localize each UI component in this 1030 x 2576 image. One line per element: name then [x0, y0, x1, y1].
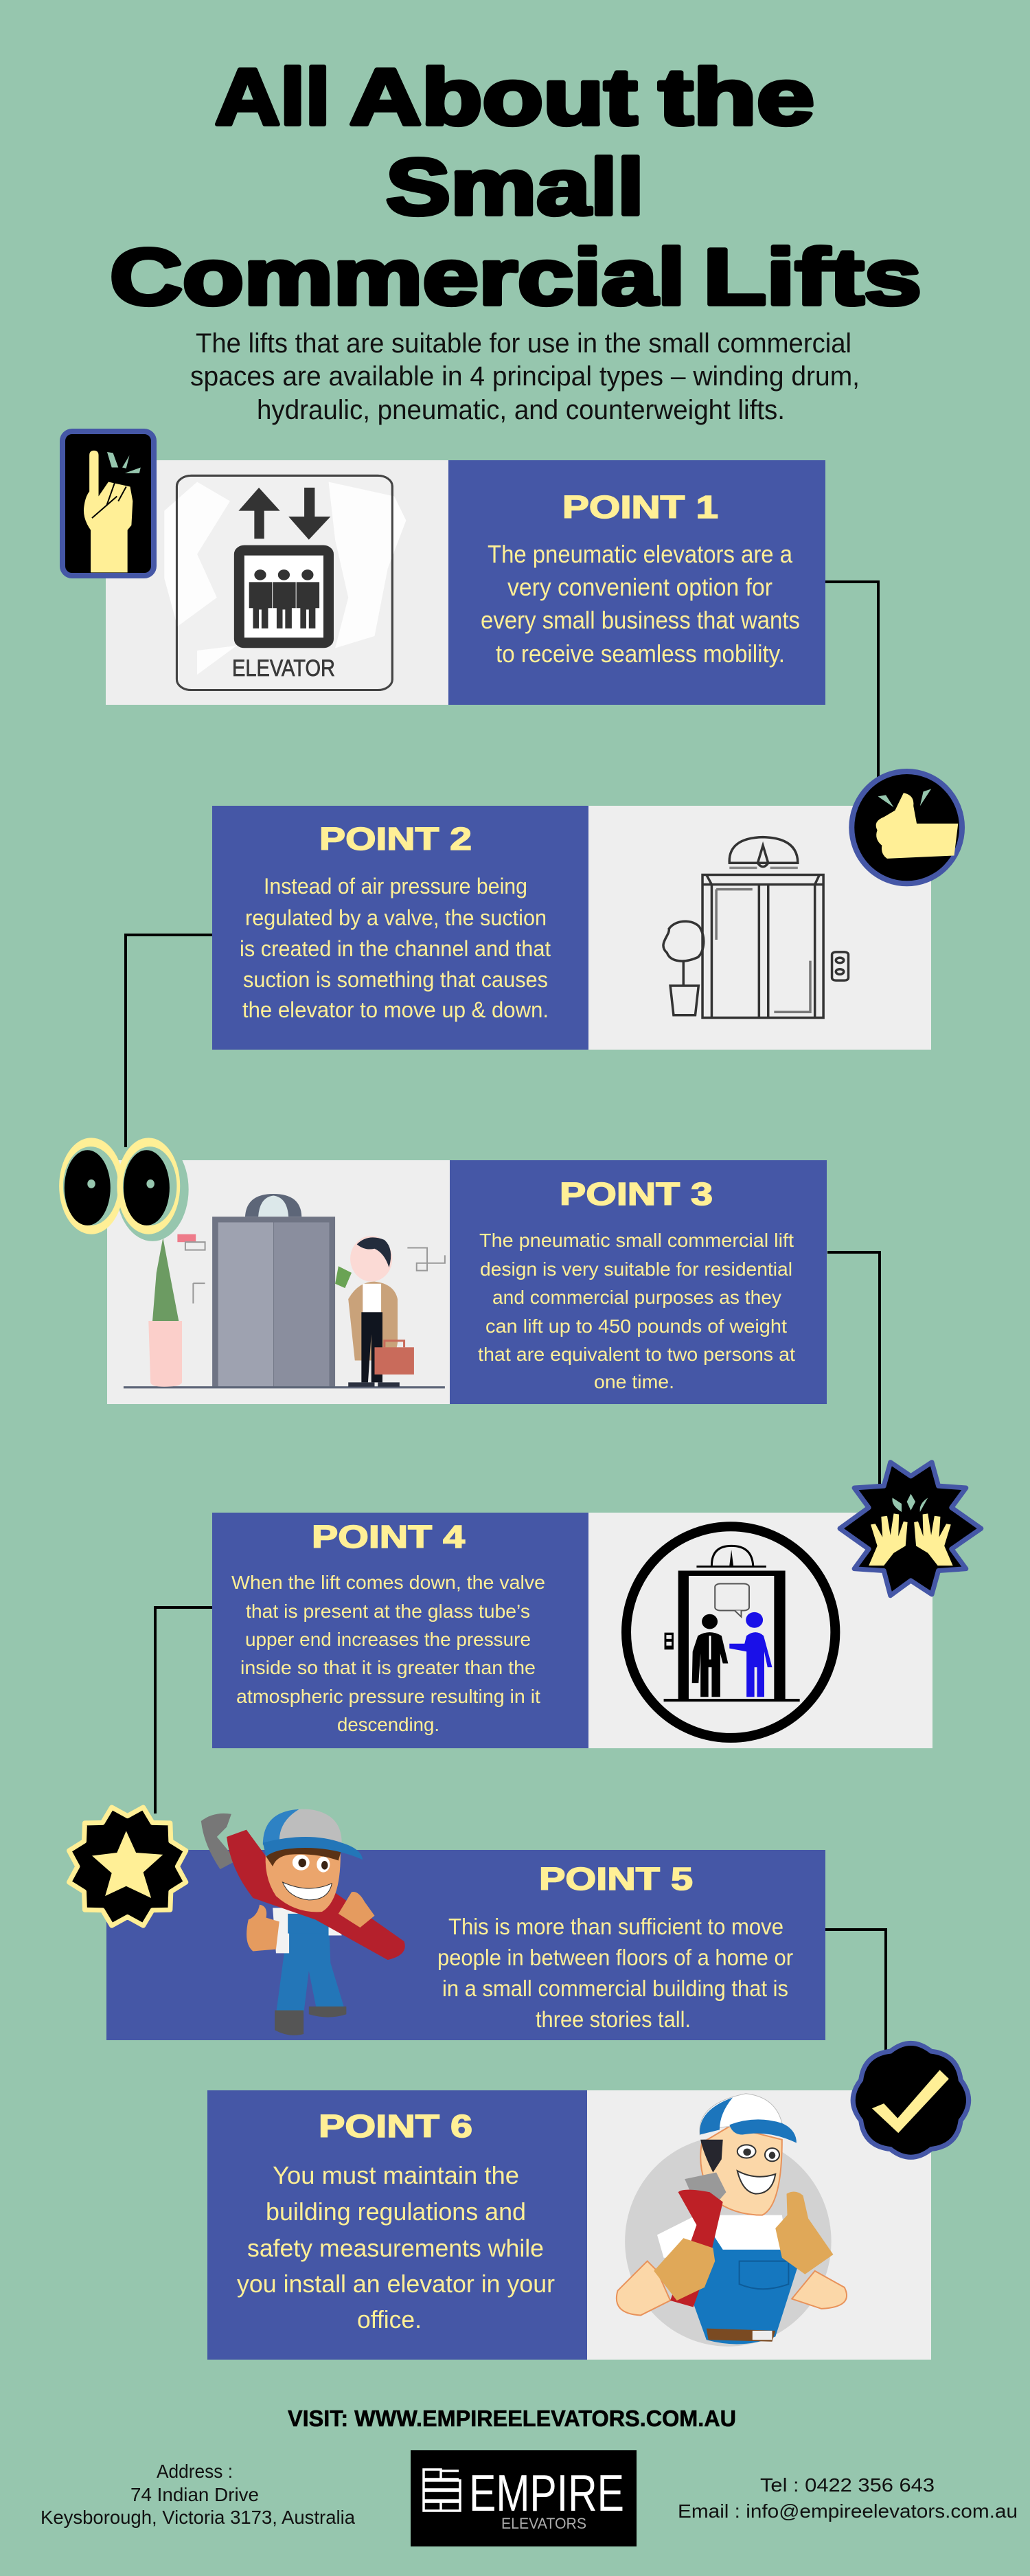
icon: check mark badge — [853, 2043, 969, 2157]
address block — [41, 2461, 355, 2528]
panel: point 3: design is very suitable for residential — [480, 1258, 792, 1280]
panel: point 4: POINT 4 — [312, 1519, 466, 1555]
logo: Empire Elevators — [411, 2450, 637, 2546]
title: About — [350, 52, 637, 142]
icon: mechanic with thumbs up — [617, 2094, 847, 2347]
icon: star badge — [69, 1807, 186, 1925]
logo: Empire Elevators: EMPIRE — [469, 2464, 624, 2522]
icon: elevator sign — [164, 475, 406, 690]
panel: point 5: people in between floors of a home or — [437, 1945, 793, 1970]
address block: 74 Indian Drive — [130, 2484, 259, 2505]
panel: point 4: upper end increases the pressure — [245, 1629, 531, 1650]
panel: point 6 — [207, 2090, 931, 2360]
panel: point 3: The pneumatic small commercial lift — [479, 1230, 794, 1251]
title: the — [659, 52, 814, 142]
panel: point 1: to receive seamless mobility. — [496, 640, 785, 668]
panel: point 6: safety measurements while — [247, 2234, 544, 2262]
panel: point 1: The pneumatic elevators are a — [488, 540, 793, 568]
panel: point 6: POINT 6 — [319, 2108, 472, 2144]
panel: point 5: This is more than sufficient to move — [448, 1914, 783, 1939]
address block: Address : — [157, 2461, 233, 2482]
panel: point 3: one time. — [594, 1371, 674, 1392]
contact details: Tel : 0422 356 643 — [760, 2474, 935, 2496]
address block: Keysborough, Victoria 3173, Australia — [41, 2507, 355, 2528]
panel: point 1: ELEVATOR — [232, 655, 335, 681]
panel: point 5: three stories tall. — [536, 2007, 691, 2032]
panel: point 4: descending. — [337, 1714, 439, 1735]
panel: point 3 — [107, 1160, 827, 1404]
panel: point 4: inside so that it is greater than the — [240, 1657, 536, 1678]
panel: point 1: POINT 1 — [562, 489, 718, 525]
panel: point 4: that is present at the glass tube’s — [246, 1601, 530, 1622]
panel: point 1: very convenient option for — [507, 573, 772, 601]
icon: pointing finger badge — [62, 431, 154, 576]
icon: people in elevator ring — [626, 1526, 835, 1738]
icon: elevator and businessman — [124, 1194, 445, 1388]
icon: raised hands star badge — [840, 1462, 981, 1596]
icon: mechanic with wrench — [201, 1809, 405, 2035]
icon: line-art elevator — [663, 837, 848, 1018]
icon: thumbs up badge — [851, 771, 962, 883]
panel: point 4: atmospheric pressure resulting in it — [236, 1686, 540, 1707]
contact details — [678, 2474, 1018, 2522]
panel: point 2: POINT 2 — [319, 821, 472, 857]
intro text — [190, 328, 860, 425]
panel: point 3: that are equivalent to two persons at — [478, 1344, 795, 1365]
title: Small — [386, 142, 644, 231]
panel: point 3: POINT 3 — [560, 1176, 713, 1212]
panel: point 5: POINT 5 — [539, 1861, 693, 1897]
panel: point 1 — [106, 460, 825, 705]
contact details: Email : info@empireelevators.com.au — [678, 2500, 1018, 2522]
panel: point 4: When the lift comes down, the valve — [231, 1572, 545, 1593]
icon: eyes — [59, 1138, 189, 1241]
intro text: The lifts that are suitable for use in the small commercial — [196, 328, 851, 359]
panel: point 6: you install an elevator in your — [237, 2270, 555, 2298]
title: All — [215, 52, 330, 142]
logo: Empire Elevators: ELEVATORS — [501, 2515, 586, 2532]
panel: point 2: regulated by a valve, the suction — [245, 905, 547, 930]
panel: point 6: building regulations and — [266, 2197, 526, 2226]
icon: logo building mark — [424, 2470, 460, 2511]
panel: point 4 — [212, 1513, 932, 1748]
panel: point 2: is created in the channel and that — [240, 936, 551, 961]
intro text: spaces are available in 4 principal types – winding drum, — [190, 361, 860, 392]
website link: VISIT: WWW.EMPIREELEVATORS.COM.AU — [288, 2406, 736, 2431]
panel: point 1: every small business that wants — [481, 606, 800, 634]
panel: point 5: in a small commercial building that is — [442, 1976, 788, 2001]
panel: point 2 — [212, 806, 931, 1050]
panel: point 3: can lift up to 450 pounds of weight — [485, 1315, 787, 1337]
panel: point 3: and commercial purposes as they — [492, 1287, 781, 1308]
title — [110, 52, 922, 321]
intro text: hydraulic, pneumatic, and counterweight lifts. — [257, 395, 785, 425]
panel: point 2: Instead of air pressure being — [264, 874, 527, 899]
panel: point 2: suction is something that causes — [243, 967, 548, 992]
title: Commercial — [110, 232, 685, 321]
connector lines — [126, 582, 886, 2050]
panel: point 6: office. — [357, 2305, 422, 2334]
panel: point 6: You must maintain the — [273, 2161, 519, 2189]
title: Lifts — [703, 232, 922, 321]
panel: point 2: the elevator to move up & down. — [242, 997, 549, 1022]
panel: point 5 — [106, 1809, 825, 2040]
